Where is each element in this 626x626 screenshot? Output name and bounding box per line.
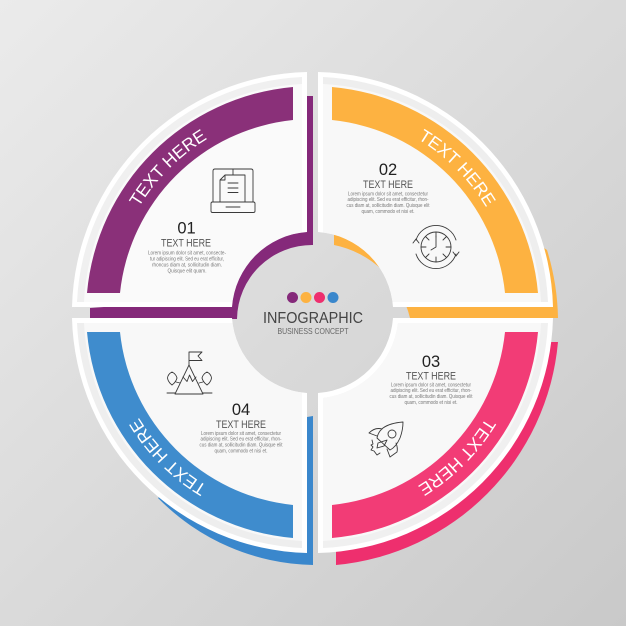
color dots: [287, 292, 338, 303]
text block 01: Lorem ipsum dolor sit amet, consecte-: [148, 250, 226, 256]
banner text 2: TEXT HERE: [422, 128, 496, 207]
text block 04: [200, 401, 283, 454]
text block 02: TEXT HERE: [363, 179, 413, 191]
band: orange: [332, 87, 538, 293]
panel 03: pink: [318, 318, 553, 553]
center: infographic title: [263, 292, 363, 336]
text block 02: cus diam at, sollicitudin diam. Quisque elit: [346, 203, 430, 209]
panel 01: purple: [72, 72, 307, 307]
text block 01: 01: [177, 220, 196, 238]
text block 03: [390, 353, 473, 406]
text block 01: TEXT HERE: [161, 238, 211, 250]
text block 03: adipiscing elit. Sed eu erat efficitur, rhon-: [390, 388, 472, 394]
banner text 4: TEXT HERE: [129, 418, 204, 496]
panel 04: blue: [72, 318, 307, 553]
panel 02: orange: [318, 72, 553, 307]
text block 01: [148, 220, 226, 274]
icon: rocket: [369, 422, 403, 457]
text block 01: tur adipiscing elit. Sed eu erat efficitur,: [150, 256, 224, 262]
text block 04: cus diam at, sollicitudin diam. Quisque elit: [200, 442, 283, 448]
text block 04: TEXT HERE: [216, 419, 266, 431]
text block 03: 03: [422, 353, 440, 371]
text block 01: Quisque elit quam.: [168, 268, 206, 274]
text block 04: quam, commodo et nisi et.: [214, 448, 268, 454]
band: purple: [87, 87, 293, 293]
icon: mountain with flags: [167, 352, 212, 394]
text block 04: Lorem ipsum dolor sit amet, consectetur: [201, 431, 281, 437]
title: INFOGRAPHIC: [263, 310, 363, 327]
text block 03: TEXT HERE: [406, 370, 456, 382]
subtitle: BUSINESS CONCEPT: [278, 326, 348, 336]
text block 04: 04: [232, 401, 250, 419]
back shape: blue: [158, 416, 313, 565]
banner text 1: TEXT HERE: [128, 129, 207, 204]
text block 02: [346, 161, 430, 215]
text block 03: Lorem ipsum dolor sit amet, consectetur: [391, 382, 471, 388]
text block 02: adipiscing elit. Sed eu erat efficitur, rhon-: [348, 197, 429, 203]
text block 01: rhoncus diam at, sollicitudin diam.: [152, 262, 222, 268]
banner text 3: TEXT HERE: [418, 422, 496, 496]
back shape: orange: [334, 150, 558, 318]
text block 03: cus diam at, sollicitudin diam. Quisque elit: [390, 394, 473, 400]
text block 03: quam, commodo et nisi et.: [404, 400, 458, 406]
back shape: pink: [336, 342, 558, 565]
icon: clock with arrows: [413, 225, 459, 269]
text block 02: 02: [379, 161, 397, 179]
text block 04: adipiscing elit. Sed eu erat efficitur, rhon-: [200, 436, 282, 442]
text block 02: Lorem ipsum dolor sit amet, consectetur: [348, 192, 428, 198]
band: pink: [332, 332, 538, 538]
icon: laptop with document: [211, 169, 255, 212]
band: blue: [87, 332, 293, 538]
text block 02: quam, commodo et nisi et.: [362, 209, 414, 215]
back shape: purple: [90, 96, 313, 319]
